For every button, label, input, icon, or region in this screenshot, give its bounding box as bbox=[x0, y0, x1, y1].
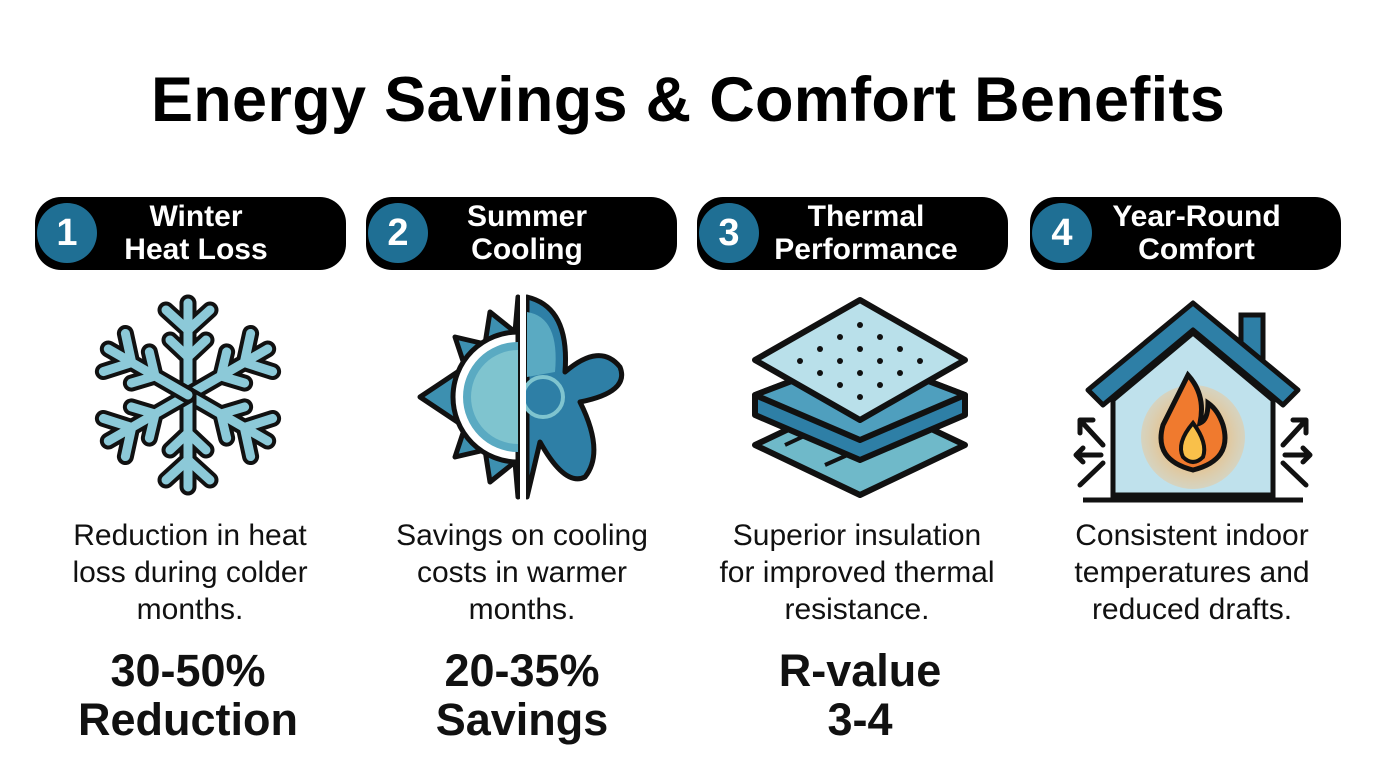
icon: house with flame bbox=[1074, 300, 1312, 502]
stat 2: 20-35% bbox=[444, 645, 600, 696]
header pill 1: Winter bbox=[149, 200, 243, 233]
description 2: months. bbox=[469, 593, 575, 626]
description 3: Superior insulation bbox=[733, 519, 981, 552]
header pill 3: 3 bbox=[718, 212, 740, 254]
stat 1: Reduction bbox=[78, 694, 298, 745]
description 1: loss during colder bbox=[72, 556, 308, 589]
stat 3: 3-4 bbox=[827, 694, 893, 745]
header pill 4: Comfort bbox=[1138, 233, 1255, 266]
description 4: reduced drafts. bbox=[1092, 593, 1292, 626]
header pill 3: Performance bbox=[774, 233, 958, 266]
description 3: for improved thermal bbox=[719, 556, 995, 589]
icon: snowflake bbox=[94, 294, 282, 496]
title: Energy Savings & Comfort Benefits bbox=[151, 65, 1225, 135]
header pill 4: 4 bbox=[1051, 212, 1073, 254]
header pill 3: Thermal bbox=[808, 200, 924, 233]
icon: sun and fan bbox=[418, 294, 624, 500]
stat 3: R-value bbox=[779, 645, 941, 696]
header pill 2: Cooling bbox=[471, 233, 583, 266]
description 2: costs in warmer bbox=[417, 556, 627, 589]
description 1: months. bbox=[137, 593, 243, 626]
description 3 bbox=[719, 519, 995, 626]
description 2 bbox=[396, 519, 648, 626]
description 1: Reduction in heat bbox=[73, 519, 307, 552]
stat 1: 30-50% bbox=[110, 645, 266, 696]
description 4: Consistent indoor bbox=[1075, 519, 1309, 552]
description 4 bbox=[1074, 519, 1310, 626]
header pill 2 bbox=[366, 197, 677, 270]
description 2: Savings on cooling bbox=[396, 519, 648, 552]
header pill 2: Summer bbox=[467, 200, 587, 233]
header pill 1: 1 bbox=[56, 212, 78, 254]
description 3: resistance. bbox=[784, 593, 930, 626]
header pill 4 bbox=[1030, 197, 1341, 270]
stat 3 bbox=[779, 645, 941, 745]
header pill 1: Heat Loss bbox=[124, 233, 268, 266]
icon: insulation layers bbox=[752, 297, 968, 498]
stat 2 bbox=[436, 645, 608, 745]
header pill 3 bbox=[697, 197, 1008, 270]
header pill 2: 2 bbox=[387, 212, 409, 254]
description 1 bbox=[72, 519, 308, 626]
stat 2: Savings bbox=[436, 694, 608, 745]
header pill 1 bbox=[35, 197, 346, 270]
header pill 4: Year-Round bbox=[1112, 200, 1281, 233]
stat 1 bbox=[78, 645, 298, 745]
description 4: temperatures and bbox=[1074, 556, 1310, 589]
